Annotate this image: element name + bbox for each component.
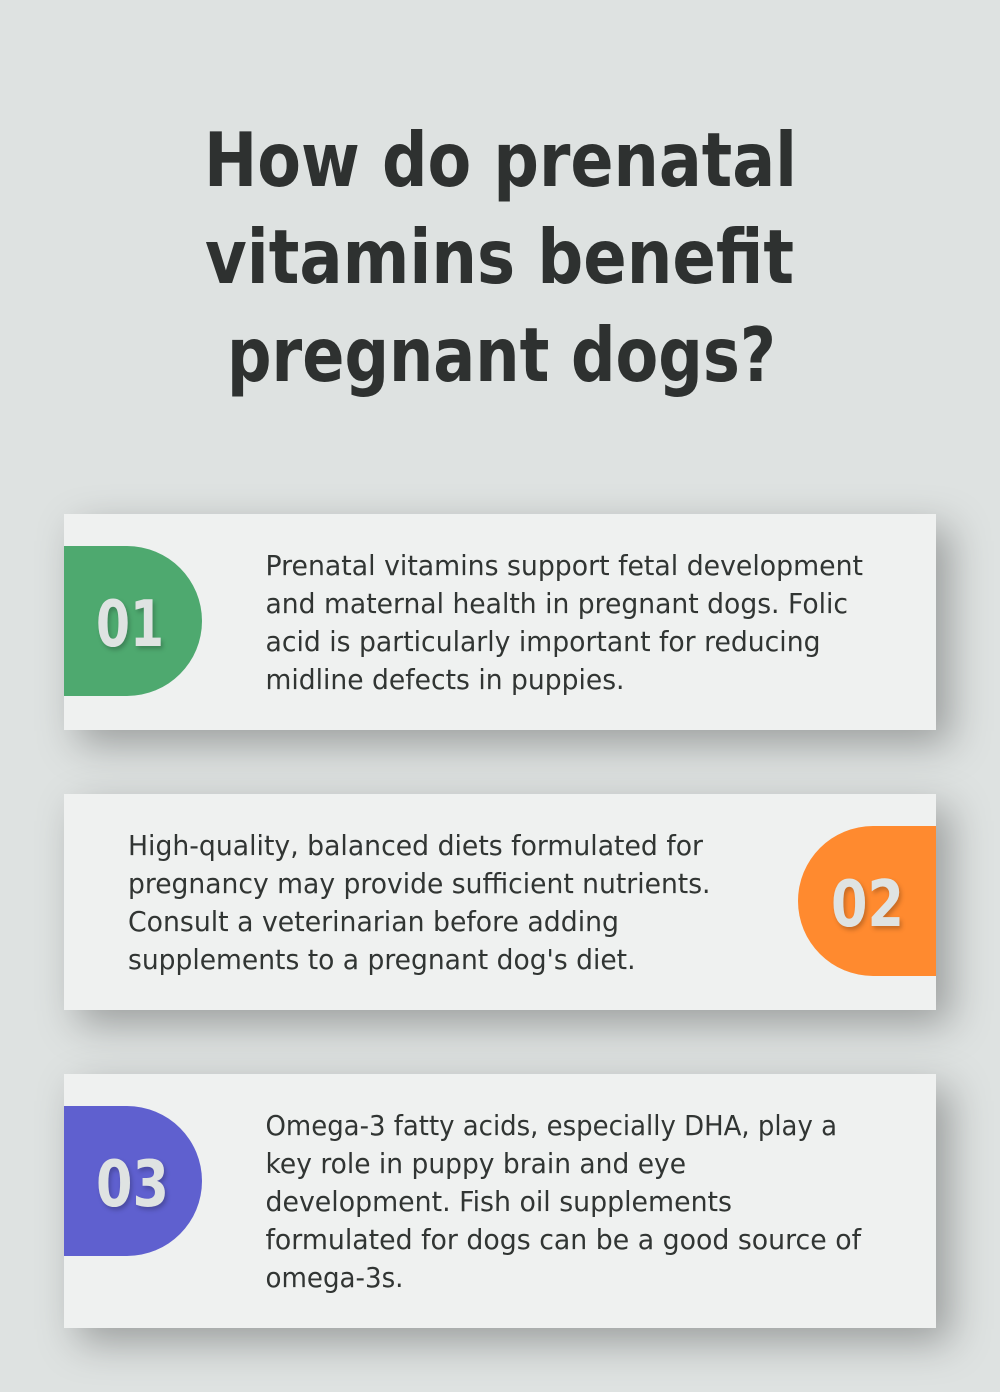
- text: step 01 description: Prenatal vitamins support fetal development: [266, 549, 863, 582]
- panel: step 03: [64, 1074, 936, 1328]
- badge: 01: 01: [96, 588, 164, 662]
- text: step 03 description: Omega-3 fatty acids, especially DHA, play a: [266, 1109, 837, 1142]
- badge: 02: 02: [831, 868, 904, 942]
- panel: step 01: [64, 514, 936, 730]
- title: [204, 116, 797, 399]
- text: step 03 description: development. Fish oil supplements: [266, 1185, 732, 1218]
- text: step 02 description: High-quality, balanced diets formulated for: [128, 829, 703, 862]
- text: step 01 description: [266, 549, 863, 696]
- text: step 01 description: and maternal health in pregnant dogs. Folic: [266, 587, 848, 620]
- title: vitamins benefit: [205, 213, 794, 301]
- badge: 03: 03: [96, 1148, 169, 1222]
- text: step 01 description: acid is particularly important for reducing: [266, 625, 820, 658]
- badge: 01: [64, 546, 202, 696]
- text: step 03 description: omega-3s.: [266, 1261, 404, 1294]
- text: step 03 description: [266, 1109, 862, 1294]
- title: pregnant dogs?: [227, 311, 776, 399]
- badge: 03: [64, 1106, 202, 1256]
- badge: 02: [798, 826, 936, 976]
- panel: step 02: [64, 794, 936, 1010]
- text: step 02 description: [128, 829, 710, 976]
- text: step 02 description: supplements to a pregnant dog's diet.: [128, 943, 636, 976]
- text: step 02 description: Consult a veterinarian before adding: [128, 905, 619, 938]
- text: step 01 description: midline defects in puppies.: [266, 663, 624, 696]
- text: step 02 description: pregnancy may provide sufficient nutrients.: [128, 867, 710, 900]
- text: step 03 description: key role in puppy brain and eye: [266, 1147, 686, 1180]
- text: step 03 description: formulated for dogs can be a good source of: [266, 1223, 862, 1256]
- title: How do prenatal: [204, 116, 797, 204]
